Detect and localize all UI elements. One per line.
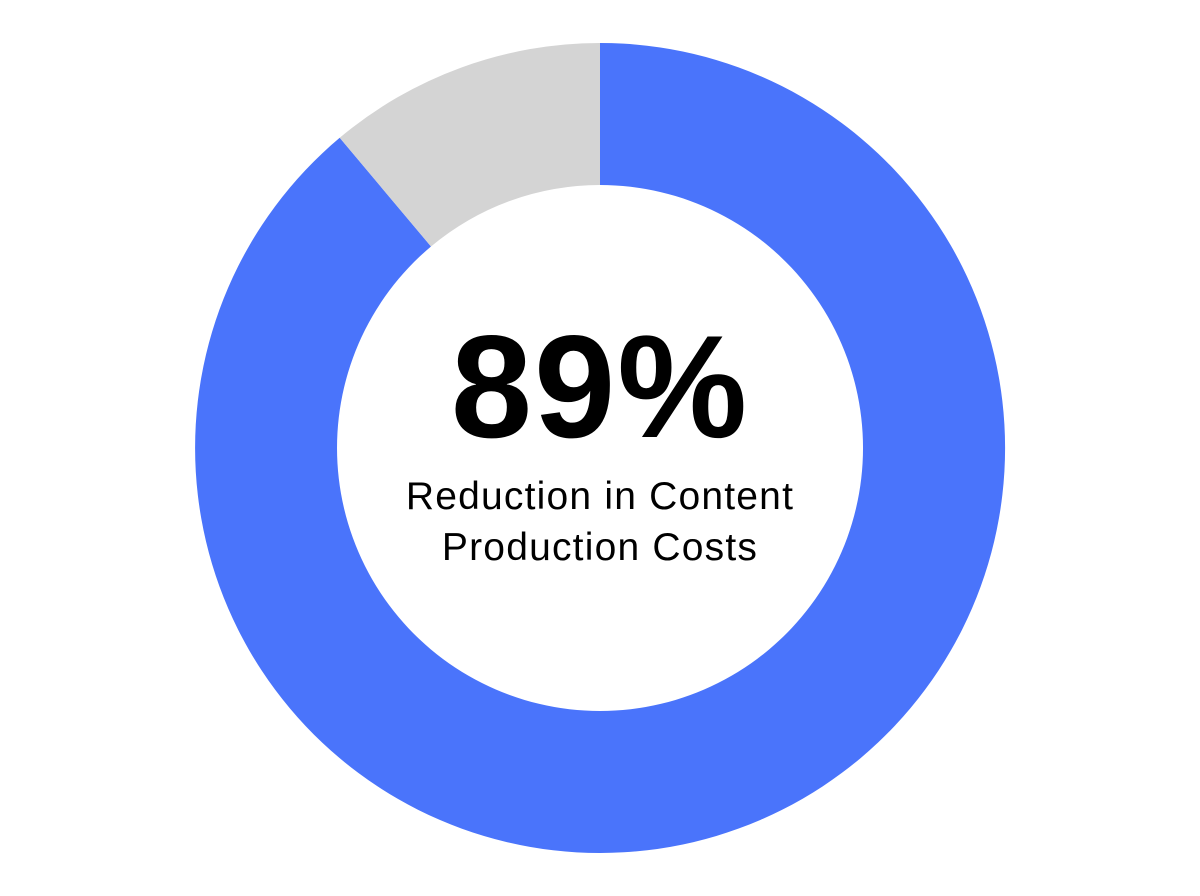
- center label: [406, 475, 794, 569]
- segment: remaining 11%: [340, 43, 600, 246]
- center label: Reduction in Content: [406, 475, 794, 518]
- center label: Production Costs: [442, 526, 758, 569]
- center value: 89%: [451, 305, 749, 468]
- segment: reduction 89%: [195, 43, 1005, 853]
